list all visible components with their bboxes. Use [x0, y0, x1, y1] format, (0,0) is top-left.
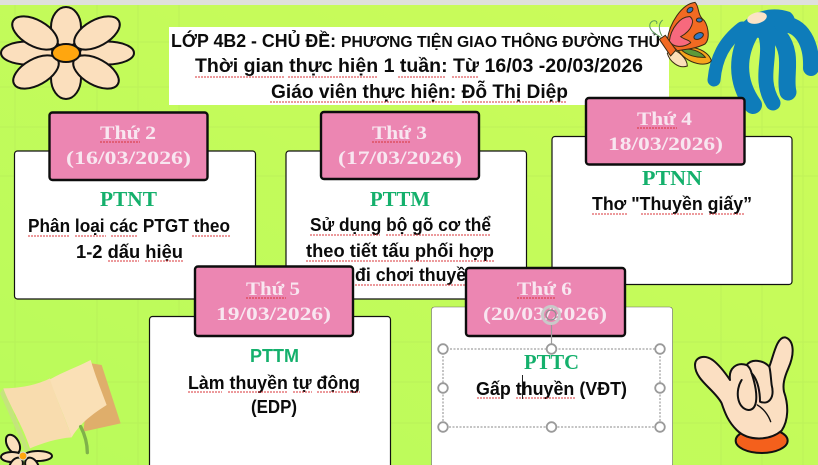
- day label: Thứ 6: Thứ 6: [517, 279, 572, 300]
- activity text: [306, 214, 494, 285]
- subject: PTNN: PTNN: [642, 166, 702, 190]
- day label: Thứ 2: (16/03/2026): [66, 148, 191, 169]
- day label: Thứ 3: Thứ 3: [372, 123, 427, 144]
- day label: Thứ 2: Thứ 2: [100, 123, 156, 144]
- icon: small daisy: [1, 432, 52, 465]
- icon: jellyfish: [714, 9, 811, 105]
- activity text: Phân loại các PTGT theo: [28, 215, 230, 236]
- subject: PTNT: PTNT: [100, 187, 157, 211]
- day label: Thứ 6: (20/03/2026): [483, 304, 607, 325]
- panel: Thứ 3: [286, 151, 526, 299]
- activity text: Thơ "Thuyền giấy”: [592, 193, 752, 214]
- day label: Thứ 6: [466, 268, 625, 336]
- panel: Thứ 4: [552, 136, 792, 284]
- icon: hand sign: [695, 337, 793, 453]
- panel: Thứ 5: [150, 316, 390, 465]
- day label: Thứ 3: [321, 112, 479, 179]
- activity text: theo tiết tấu phối hợp: [306, 240, 494, 261]
- heading block: [169, 27, 669, 105]
- heading block: LỚP 4B2 - CHỦ ĐỀ:: [171, 30, 336, 51]
- heading block: Giáo viên thực hiện: Đỗ Thị Diệp: [271, 79, 568, 103]
- activity text: (EDP): [251, 396, 297, 417]
- day label: Thứ 4: 18/03/2026): [608, 134, 723, 155]
- day label: Thứ 5: 19/03/2026): [216, 304, 331, 325]
- panel: Thứ 6: [432, 307, 672, 465]
- day label: Thứ 5: Thứ 5: [246, 279, 300, 300]
- subject: PTTM: PTTM: [250, 345, 299, 366]
- activity text: Gấp thuyền (VĐT): [476, 378, 627, 399]
- subject: PTTC: PTTC: [524, 350, 579, 374]
- subject: PTTM: PTTM: [370, 187, 430, 211]
- selection frame: [438, 344, 665, 432]
- day label: Thứ 4: [586, 98, 744, 164]
- activity text: [28, 215, 230, 262]
- day label: Thứ 4: Thứ 4: [637, 109, 693, 130]
- icon: rotate handle: [542, 306, 560, 344]
- day label: Thứ 2: [50, 112, 208, 180]
- panel: Thứ 2: [14, 151, 256, 299]
- activity text: Sử dụng bộ gõ cơ thể: [310, 214, 491, 235]
- icon: open book: [0, 360, 121, 453]
- day label: Thứ 5: [195, 266, 353, 336]
- heading block: PHƯƠNG TIỆN GIAO THÔNG ĐƯỜNG THỦ: [341, 33, 660, 51]
- heading block: Thời gian thực hiện 1 tuần: Từ 16/03 -20/03/2026: [195, 55, 643, 77]
- activity text: 1-2 dấu hiệu: [76, 241, 183, 262]
- day label: Thứ 3: (17/03/2026): [338, 148, 462, 169]
- activity text: Làm thuyền tự động: [188, 372, 360, 393]
- activity text: [188, 372, 360, 417]
- icon: butterfly: [650, 2, 711, 67]
- icon: daisy flower: [1, 7, 134, 99]
- activity text: đi chơi thuyền: [355, 264, 477, 285]
